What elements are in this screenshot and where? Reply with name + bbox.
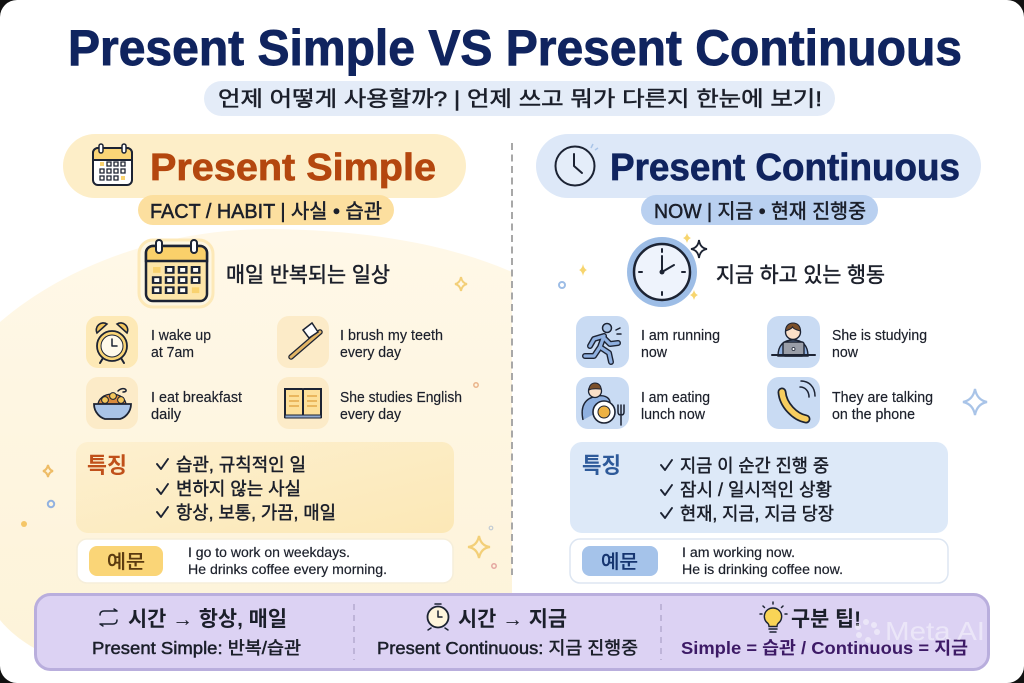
- title: Present Simple VS Present Continuous: [68, 20, 962, 76]
- example: phone: They are talking: [832, 390, 933, 406]
- example: breakfast: daily: [151, 407, 182, 423]
- example: studies english: She studies English: [340, 390, 462, 406]
- example sentences: continuous: He is drinking coffee now.: [682, 562, 843, 577]
- example: running: I am running: [641, 328, 720, 344]
- summary: simple: 시간 → 항상, 매일: [128, 608, 287, 631]
- example: phone: on the phone: [832, 407, 915, 423]
- example sentences: simple: I go to work on weekdays.: [188, 545, 350, 560]
- example: brush teeth: I brush my teeth: [340, 328, 443, 344]
- features box: simple: 항상, 보통, 가끔, 매일: [176, 503, 336, 523]
- subtitle pill: 언제 어떻게 사용할까? | 언제 쓰고 뭐가 다른지 한눈에 보기!: [218, 88, 822, 111]
- tag: now: NOW | 지금 • 현재 진행중: [654, 200, 866, 223]
- sparkle decorations: [21, 264, 987, 568]
- example sentences: continuous: I am working now.: [682, 545, 795, 560]
- example sentences: simple: [77, 539, 453, 583]
- features box: simple: [76, 442, 454, 533]
- summary: tip: Simple = 습관 / Continuous = 지금: [681, 638, 968, 658]
- features box: simple: 특징: [87, 453, 127, 478]
- heading: present continuous: Present Continuous: [610, 147, 960, 189]
- example: studying: [767, 316, 927, 368]
- heading: present simple: Present Simple: [150, 147, 436, 189]
- summary: simple: Present Simple: 반복/습관: [92, 638, 301, 658]
- example: eating: I am eating: [641, 390, 710, 406]
- example sentences: simple: 예문: [107, 551, 145, 573]
- example: studying: now: [832, 345, 859, 361]
- subtitle pill: [204, 81, 835, 116]
- tag: fact habit: FACT / HABIT | 사실 • 습관: [150, 200, 382, 223]
- icon: small clock: [556, 144, 598, 186]
- tag: fact habit: [138, 195, 394, 225]
- features box: continuous: [570, 442, 948, 533]
- example: brush teeth: [277, 316, 443, 368]
- example: wake up: [86, 316, 211, 368]
- watermark: meta ai: [855, 616, 985, 646]
- text: daily routine: 매일 반복되는 일상: [226, 264, 390, 287]
- summary: continuous: Present Continuous: 지금 진행중: [377, 638, 638, 658]
- summary: tip: 구분 팁!: [791, 608, 861, 631]
- example: studying: She is studying: [832, 328, 927, 344]
- heading: present continuous: [536, 134, 981, 198]
- example: wake up: I wake up: [151, 328, 211, 344]
- heading: present simple: [63, 134, 466, 198]
- example sentences: simple: He drinks coffee every morning.: [188, 562, 387, 577]
- panel: present continuous: [536, 134, 981, 583]
- example: running: now: [641, 345, 668, 361]
- features box: continuous: 현재, 지금, 지금 당장: [680, 504, 834, 524]
- watermark: meta ai: Meta AI: [885, 616, 985, 646]
- summary: tip: [681, 602, 968, 658]
- example: studies english: every day: [340, 407, 402, 423]
- example: brush teeth: every day: [340, 345, 402, 361]
- features box: continuous: 잠시 / 일시적인 상황: [680, 480, 832, 500]
- icon: big clock: [627, 233, 707, 307]
- example: breakfast: I eat breakfast: [151, 390, 242, 406]
- bottom summary bar: [36, 594, 988, 670]
- features box: continuous: 지금 이 순간 진행 중: [680, 456, 829, 476]
- summary: continuous: [377, 604, 638, 658]
- example: eating: [576, 377, 710, 429]
- example sentences: continuous: 예문: [601, 551, 638, 573]
- example sentences: continuous: [570, 539, 948, 583]
- text: current action: 지금 하고 있는 행동: [716, 264, 885, 287]
- icon: big calendar: [139, 240, 213, 307]
- example: running: [576, 316, 720, 368]
- tag: now: [641, 195, 878, 225]
- example: studies english: [277, 377, 462, 429]
- icon: small calendar: [93, 144, 132, 185]
- example: eating: lunch now: [641, 407, 706, 423]
- example: wake up: at 7am: [151, 345, 194, 361]
- features box: simple: 습관, 규칙적인 일: [176, 455, 306, 475]
- example: breakfast: [86, 377, 242, 429]
- summary: simple: [92, 608, 301, 658]
- summary: continuous: 시간 → 지금: [458, 608, 567, 631]
- features box: simple: 변하지 않는 사실: [176, 479, 301, 499]
- panel: present simple: [63, 134, 466, 583]
- example: phone: [767, 377, 933, 429]
- features box: continuous: 특징: [582, 453, 621, 478]
